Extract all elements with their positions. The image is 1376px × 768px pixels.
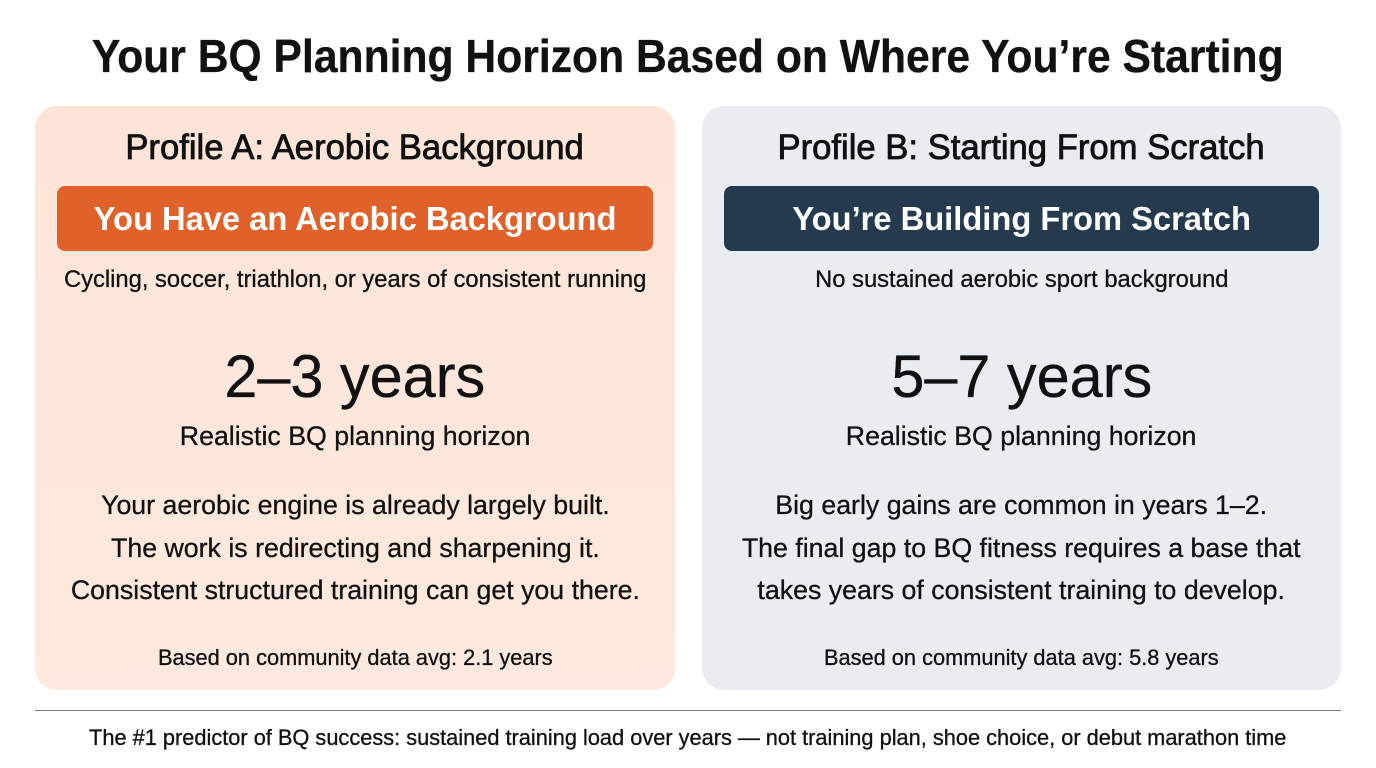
subtitle B: No sustained aerobic sport background: [815, 266, 1228, 293]
banner A: You Have an Aerobic Background: [94, 200, 616, 237]
title: Your BQ Planning Horizon Based on Where You’re Starting: [92, 30, 1284, 82]
body B: The final gap to BQ fitness requires a base that: [742, 532, 1301, 562]
body B: Big early gains are common in years 1–2.: [776, 490, 1267, 520]
caption A: Realistic BQ planning horizon: [180, 421, 530, 451]
heading B: Profile B: Starting From Scratch: [778, 128, 1265, 167]
panel: profile A: [35, 106, 675, 690]
banner B: You’re Building From Scratch: [792, 200, 1251, 237]
caption B: Realistic BQ planning horizon: [846, 421, 1197, 451]
body A: [70, 490, 640, 605]
heading A: Profile A: Aerobic Background: [126, 128, 584, 167]
footnote B: Based on community data avg: 5.8 years: [824, 645, 1219, 670]
big number B: 5–7 years: [891, 343, 1152, 410]
body B: takes years of consistent training to develop.: [758, 575, 1285, 605]
banner B: [724, 186, 1319, 251]
body A: Consistent structured training can get you there.: [70, 575, 640, 605]
panel: profile B: [702, 106, 1341, 690]
body A: Your aerobic engine is already largely built.: [101, 490, 609, 520]
big number A: 2–3 years: [225, 343, 485, 410]
subtitle A: Cycling, soccer, triathlon, or years of consistent running: [64, 266, 646, 293]
body A: The work is redirecting and sharpening it.: [111, 532, 599, 562]
banner A: [57, 186, 653, 251]
footnote A: Based on community data avg: 2.1 years: [158, 645, 552, 670]
body B: [742, 490, 1301, 605]
bottom note: The #1 predictor of BQ success: sustained training load over years — not training plan, shoe choice, or debut marathon time: [89, 725, 1287, 750]
